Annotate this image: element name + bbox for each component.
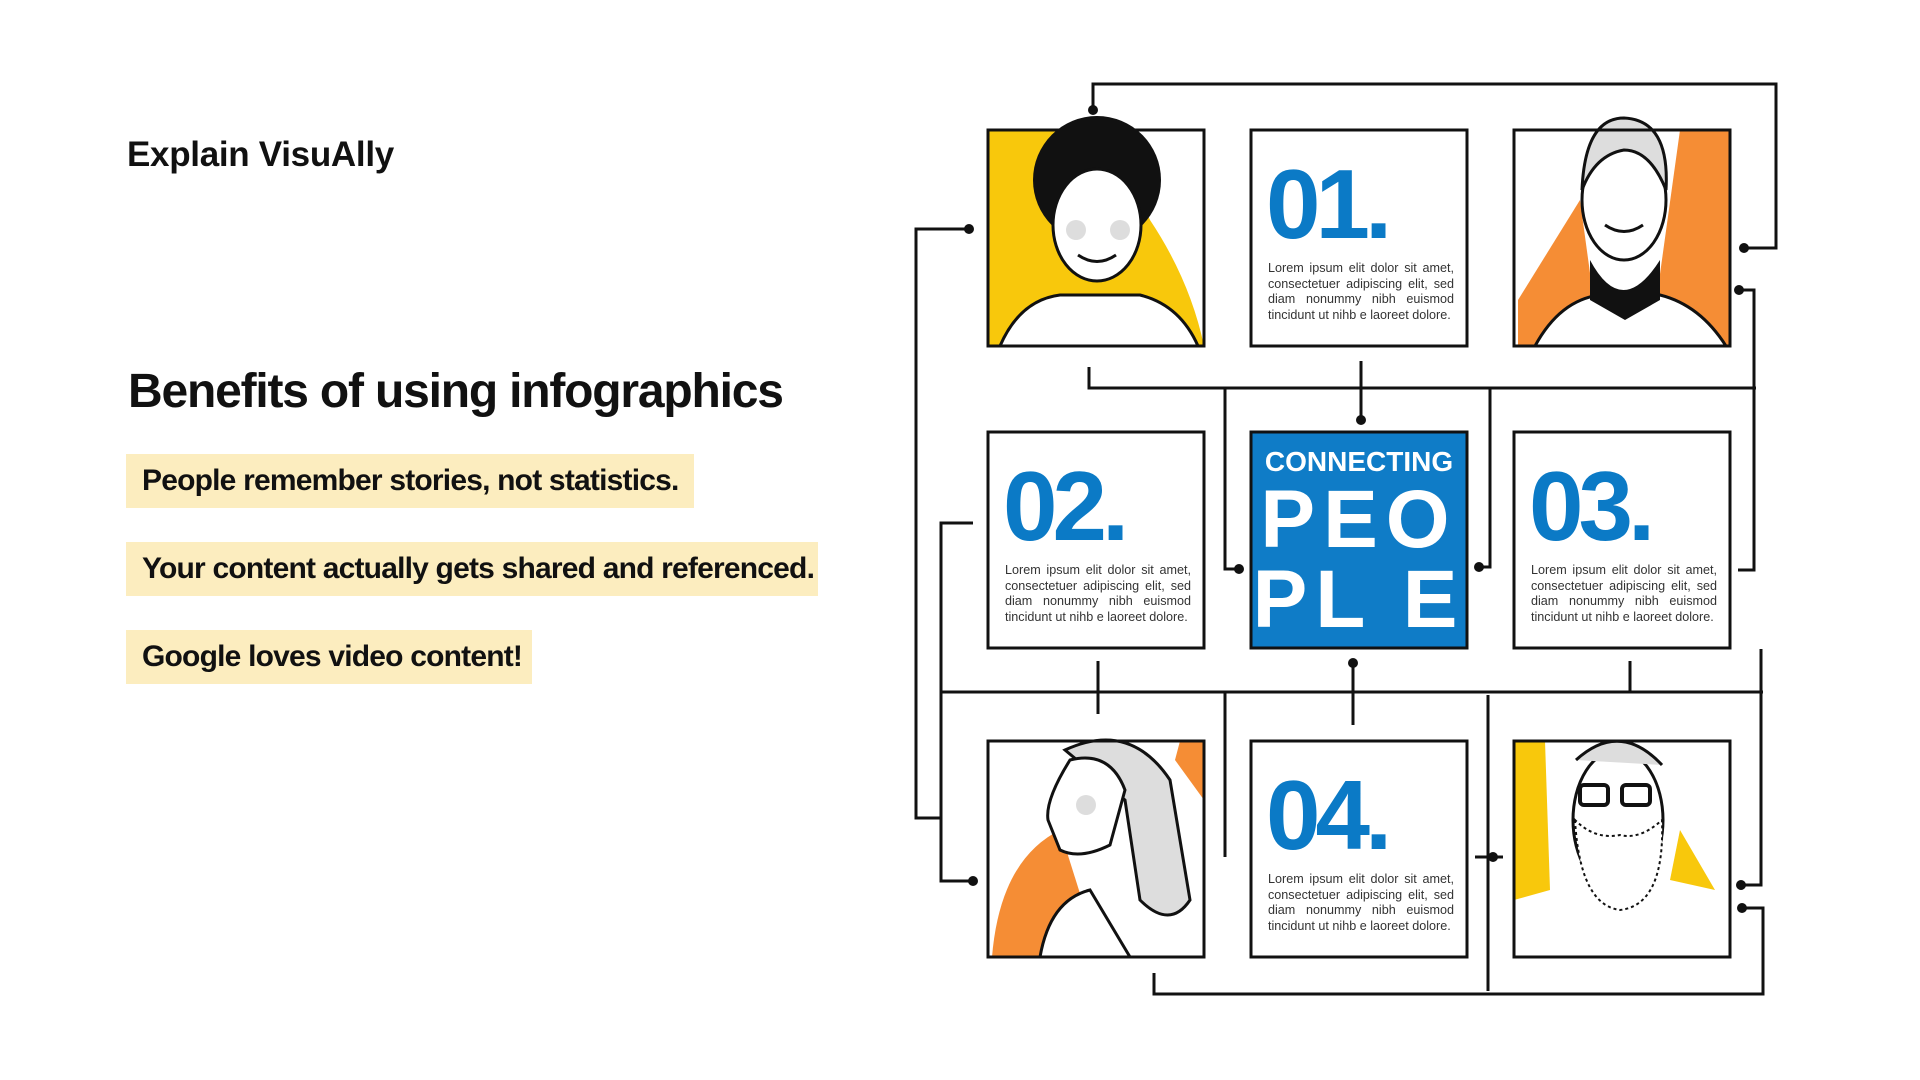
- highlight 2: [126, 542, 818, 596]
- text 02: Lorem ipsum elit dolor sit amet, consectetuer adipiscing elit, sed diam nonummy nibh euismod tincidunt ut nihb e laoreet dolore.: [1005, 563, 1191, 624]
- card 02: [988, 432, 1204, 648]
- card 03: [1514, 432, 1730, 648]
- logo: Explain VisuAlly: [127, 135, 394, 174]
- card 04: [1251, 741, 1467, 957]
- highlight 3: [126, 630, 532, 684]
- highlight 3: Google loves video content!: [142, 640, 522, 673]
- number 03: 03.: [1529, 451, 1650, 561]
- card: woman curly hair: [988, 116, 1204, 346]
- card 01: [1251, 130, 1467, 346]
- title: Benefits of using infographics: [128, 365, 783, 418]
- text 01: Lorem ipsum elit dolor sit amet, consectetuer adipiscing elit, sed diam nonummy nibh euismod tincidunt ut nihb e laoreet dolore.: [1268, 261, 1454, 322]
- connecting people text: CONNECTING: [1265, 446, 1453, 477]
- highlight 1: [126, 454, 694, 508]
- highlight 1: People remember stories, not statistics.: [142, 464, 679, 497]
- text 04: Lorem ipsum elit dolor sit amet, consectetuer adipiscing elit, sed diam nonummy nibh euismod tincidunt ut nihb e laoreet dolore.: [1268, 872, 1454, 932]
- connecting people text: PL E: [1253, 554, 1465, 645]
- connecting people text: [1253, 446, 1465, 645]
- card: man smiling: [1514, 118, 1730, 346]
- connecting people text: PEO: [1260, 474, 1458, 565]
- card: woman profile: [988, 740, 1204, 957]
- card: bearded man: [1514, 741, 1730, 957]
- number 01: 01.: [1266, 149, 1387, 259]
- number 02: 02.: [1003, 451, 1124, 561]
- highlight 2: Your content actually gets shared and referenced.: [142, 552, 814, 585]
- number 04: 04.: [1266, 760, 1387, 870]
- card: connecting people: [1251, 432, 1467, 648]
- text 03: Lorem ipsum elit dolor sit amet, consectetuer adipiscing elit, sed diam nonummy nibh euismod tincidunt ut nihb e laoreet dolore.: [1531, 563, 1717, 624]
